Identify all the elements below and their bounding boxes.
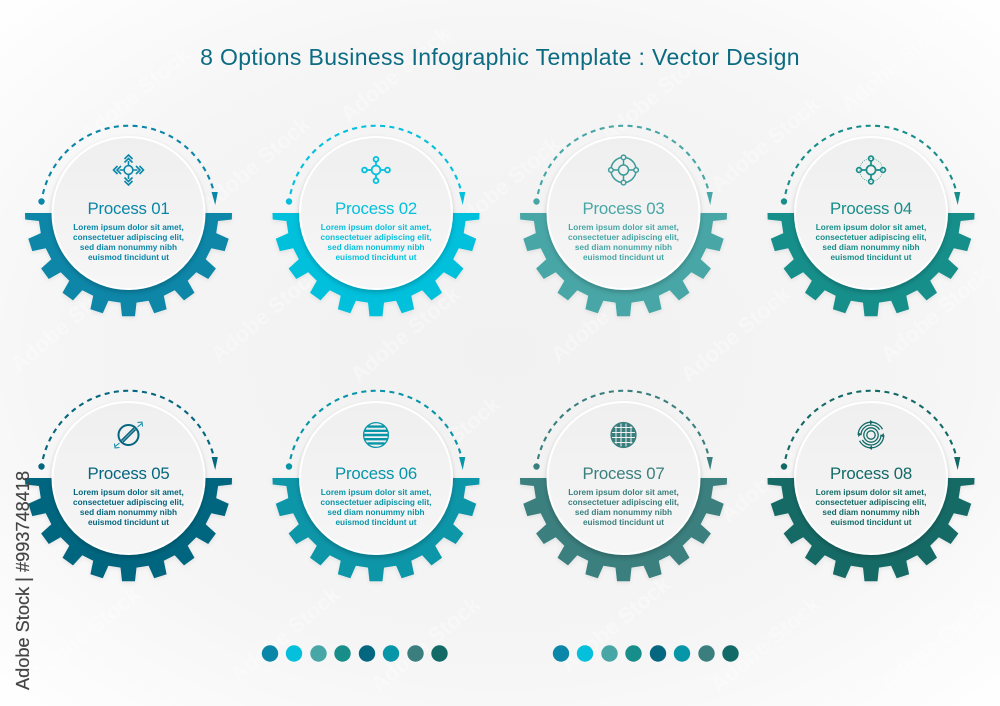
text block: consectetuer adipiscing elit, <box>816 498 926 507</box>
text: Adobe Stock <box>716 421 835 527</box>
text block: consectetuer adipiscing elit, <box>568 498 679 507</box>
heading: Process 05 <box>88 464 169 483</box>
text block: sed diam nonummy nibh <box>575 243 672 252</box>
text: Adobe Stock <box>876 261 995 367</box>
text: Adobe Stock <box>206 261 325 367</box>
text block <box>321 223 431 262</box>
text block: euismod tincidunt ut <box>88 518 169 527</box>
text block: euismod tincidunt ut <box>335 518 417 527</box>
text block <box>816 223 926 262</box>
heading: Process 01 <box>88 199 169 218</box>
text block: euismod tincidunt ut <box>830 253 912 262</box>
text: Adobe Stock <box>706 591 825 697</box>
text block: Lorem ipsum dolor sit amet, <box>321 488 431 497</box>
panel: process 03 <box>520 126 727 316</box>
text block: sed diam nonummy nibh <box>575 508 672 517</box>
text block: consectetuer adipiscing elit, <box>321 233 431 242</box>
title: 8 Options Business Infographic Template : Vector Design <box>200 44 800 70</box>
text: Adobe Stock <box>556 571 675 677</box>
text block: Lorem ipsum dolor sit amet, <box>816 488 926 497</box>
text: Adobe Stock <box>366 591 485 697</box>
panel: process 01 <box>25 126 232 316</box>
panel: process 07 <box>520 391 727 581</box>
icon: four-way arrows <box>114 155 144 185</box>
text: Adobe Stock <box>346 281 465 387</box>
icon: ring with nodes <box>609 155 638 185</box>
icon: nodes with dotted ring <box>857 156 885 184</box>
heading: Process 02 <box>335 199 417 218</box>
icon: connected nodes <box>362 157 390 183</box>
text block: consectetuer adipiscing elit, <box>73 233 184 242</box>
text: Adobe Stock <box>196 111 315 217</box>
heading: Process 04 <box>830 199 912 218</box>
text block: euismod tincidunt ut <box>583 253 664 262</box>
text block: consectetuer adipiscing elit, <box>321 498 431 507</box>
vertical stock id: Adobe Stock | #993748418 <box>13 471 33 690</box>
text block: sed diam nonummy nibh <box>822 508 920 517</box>
text: Adobe Stock <box>876 591 995 697</box>
icon: striped circle <box>364 423 388 447</box>
text: Adobe Stock <box>446 131 565 237</box>
text block <box>568 488 679 527</box>
text block: euismod tincidunt ut <box>335 253 417 262</box>
heading: Process 08 <box>830 464 912 483</box>
text: Adobe Stock <box>76 41 195 147</box>
text block <box>568 223 679 262</box>
text block: Lorem ipsum dolor sit amet, <box>816 223 926 232</box>
text: Adobe Stock <box>226 581 345 687</box>
panel: process 06 <box>272 391 480 581</box>
colour swatches: left <box>262 645 448 662</box>
text block: euismod tincidunt ut <box>583 518 664 527</box>
text block <box>816 488 926 527</box>
text block <box>73 223 184 262</box>
text: Adobe Stock <box>836 11 955 117</box>
text block <box>321 488 431 527</box>
text: Adobe Stock <box>676 281 795 387</box>
text block: Lorem ipsum dolor sit amet, <box>321 223 431 232</box>
heading: Process 07 <box>583 464 664 483</box>
text: Adobe Stock <box>706 91 825 197</box>
heading: Process 03 <box>583 199 664 218</box>
text block: Lorem ipsum dolor sit amet, <box>568 223 679 232</box>
icon: concentric rings <box>858 420 884 450</box>
text block: consectetuer adipiscing elit, <box>816 233 926 242</box>
text block: sed diam nonummy nibh <box>80 508 177 517</box>
heading: Process 06 <box>335 464 417 483</box>
text block: consectetuer adipiscing elit, <box>568 233 679 242</box>
panel: process 04 <box>768 126 974 316</box>
text: Adobe Stock <box>546 261 665 367</box>
text block: sed diam nonummy nibh <box>327 243 425 252</box>
text: Adobe Stock <box>386 391 505 497</box>
text block: Lorem ipsum dolor sit amet, <box>568 488 679 497</box>
icon: grid circle <box>611 423 636 447</box>
text block <box>73 488 184 527</box>
text block: sed diam nonummy nibh <box>80 243 177 252</box>
text block: euismod tincidunt ut <box>830 518 912 527</box>
text block: consectetuer adipiscing elit, <box>73 498 184 507</box>
panel: process 05 <box>25 391 232 581</box>
colour swatches: right <box>553 645 739 662</box>
text: Adobe Stock <box>6 271 125 377</box>
text: Adobe Stock <box>66 411 185 517</box>
text: Adobe Stock <box>26 581 145 687</box>
text block: sed diam nonummy nibh <box>327 508 425 517</box>
text block: euismod tincidunt ut <box>88 253 169 262</box>
panel: process 08 <box>768 391 974 581</box>
panel: process 02 <box>272 126 480 316</box>
text: Adobe Stock <box>336 21 455 127</box>
text block: sed diam nonummy nibh <box>822 243 920 252</box>
text block: Lorem ipsum dolor sit amet, <box>73 223 184 232</box>
text: Adobe Stock <box>596 41 715 147</box>
text block: Lorem ipsum dolor sit amet, <box>73 488 184 497</box>
icon: ring with diagonal bars <box>114 422 142 448</box>
